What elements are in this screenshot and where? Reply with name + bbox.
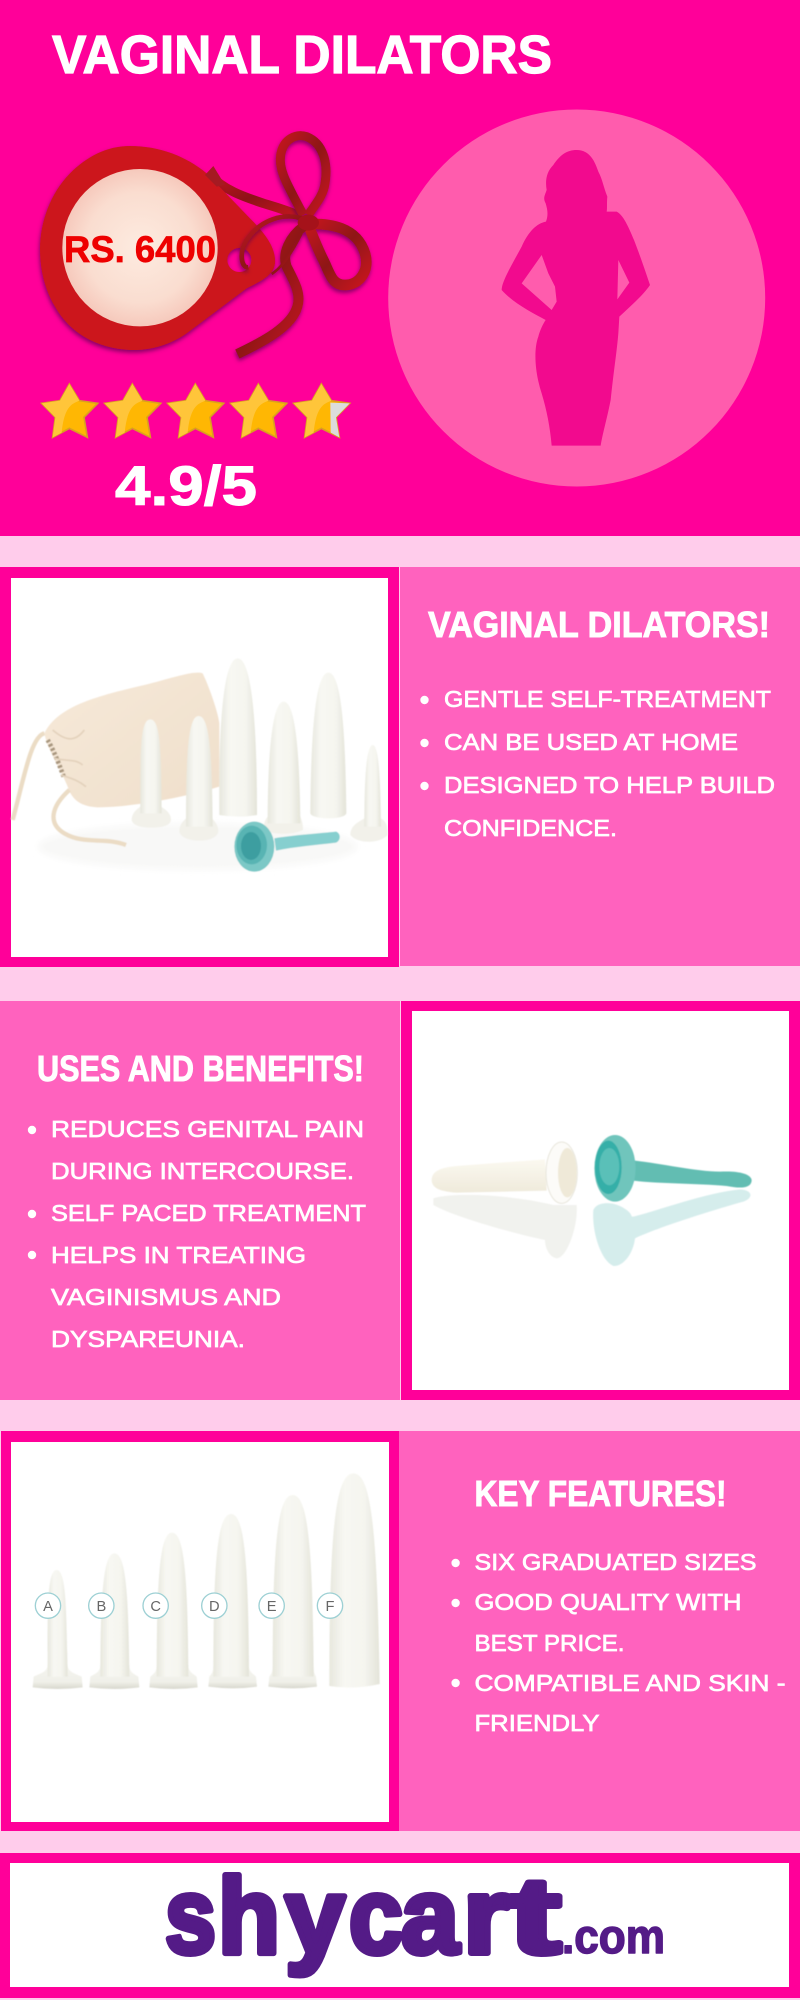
bullet list [28,1116,366,1352]
bullet list: CAN BE USED AT HOME [444,729,738,755]
size label D: D [209,1599,220,1615]
bullet list: COMPATIBLE AND SKIN - [474,1670,786,1696]
size label E: E [267,1599,277,1615]
size label C: C [150,1599,161,1615]
logo: shycart.com: y [285,1855,345,1976]
bullet list [420,686,775,841]
logo: shycart.com: t [509,1855,561,1976]
rating stars [42,384,350,437]
size label E [259,1593,284,1618]
price text: RS. 6400 [64,229,216,270]
logo: shycart.com: s [165,1855,216,1976]
panel: product photo with bag [0,567,399,967]
panel: key features text [399,1431,800,1831]
header panel [0,0,800,536]
photo: dilator set and bag [13,658,388,872]
heading: VAGINAL DILATORS! [428,604,770,645]
bullet list: CONFIDENCE. [444,815,617,841]
bullet list: HELPS IN TREATING [51,1242,306,1268]
logo: shycart.com: c [349,1855,403,1976]
bullet list: SIX GRADUATED SIZES [474,1549,756,1575]
size label D [202,1593,227,1618]
rating value: 4.9/5 [115,454,257,517]
bullet list: GOOD QUALITY WITH [474,1589,742,1615]
price tag [40,136,366,354]
title: VAGINAL DILATORS [52,25,552,85]
size label F [317,1593,343,1618]
star 3 [168,384,224,437]
size label B [89,1593,114,1618]
star 5 partial [294,384,350,437]
logo: shycart.com: h [218,1855,280,1976]
size label B: B [96,1599,106,1615]
icon: woman silhouette [502,150,650,446]
star 1 [42,384,98,437]
size label F: F [326,1599,335,1615]
size label A [35,1593,61,1618]
panel: uses and benefits text [0,1001,400,1400]
size label C [143,1593,168,1618]
bullet list: VAGINISMUS AND [51,1284,281,1310]
panel: vaginal dilators text [400,567,800,966]
star 2 [105,384,161,437]
logo: shycart.com: r [463,1855,509,1976]
bullet list: SELF PACED TREATMENT [51,1200,366,1226]
panel: six sizes photo [1,1431,399,1831]
bullet list: FRIENDLY [474,1710,600,1736]
panel: logo footer [0,1853,800,1998]
bullet list: DYSPAREUNIA. [51,1326,245,1352]
heading: USES AND BENEFITS! [37,1048,364,1089]
size label A: A [43,1599,53,1615]
bullet list: DESIGNED TO HELP BUILD [444,772,775,798]
bullet list: BEST PRICE. [474,1630,624,1656]
star 4 [231,384,287,437]
silhouette circle [388,110,765,486]
bullet list: REDUCES GENITAL PAIN [51,1116,364,1142]
bullet list [451,1549,786,1736]
logo: shycart.com: .com [562,1911,665,1964]
bullet list: DURING INTERCOURSE. [51,1158,354,1184]
heading: KEY FEATURES! [474,1473,726,1514]
logo: shycart.com: a [401,1855,460,1976]
logo: shycart.com [165,1855,665,1976]
photo: dilator and teal handle [432,1135,752,1266]
bullet list: GENTLE SELF-TREATMENT [444,686,771,712]
photo: graduated dilators A to F [33,1473,380,1689]
panel: product photo applicator [401,1001,800,1400]
